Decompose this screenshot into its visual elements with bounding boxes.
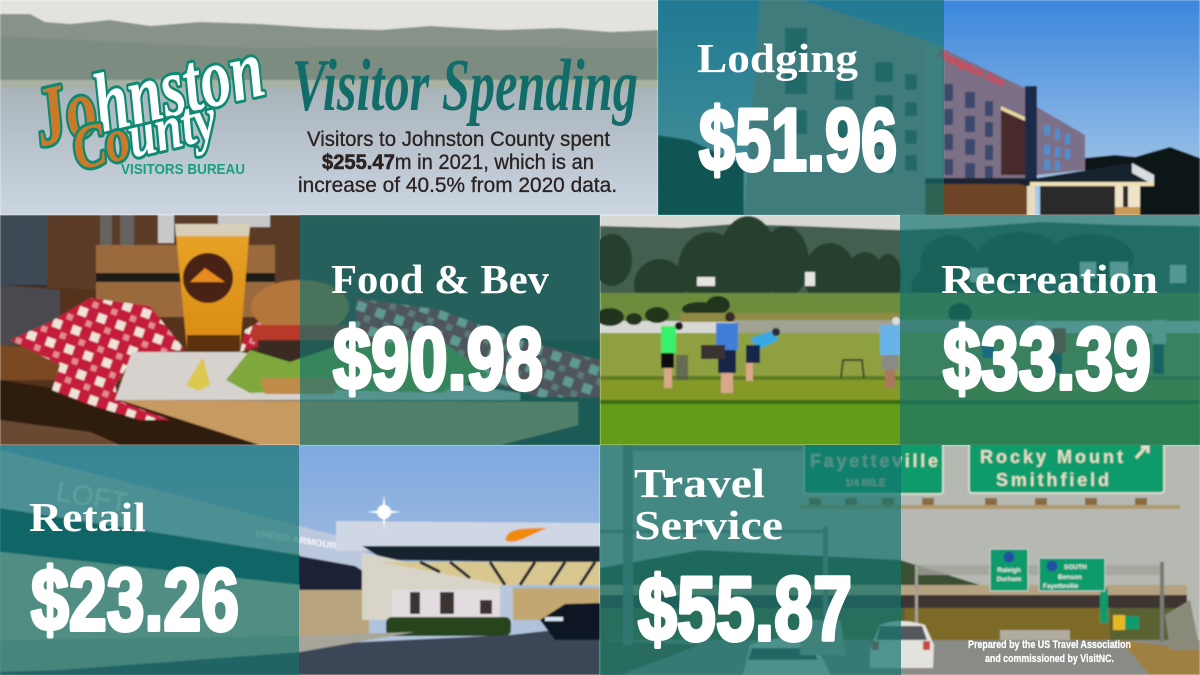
logo wordmark County: County bbox=[66, 85, 223, 184]
summary paragraph bbox=[299, 130, 616, 192]
source note bbox=[968, 639, 1131, 665]
category label bbox=[634, 460, 783, 548]
highway sign: Fayetteville: Fayetteville bbox=[810, 451, 938, 471]
category label: Service bbox=[634, 502, 783, 548]
highway sign: Rocky Mount Smithfield bbox=[969, 438, 1164, 493]
category label: Retail bbox=[29, 494, 146, 540]
source note: Prepared by the US Travel Association bbox=[968, 639, 1131, 651]
spending value: $51.96 bbox=[699, 90, 897, 189]
category label: Lodging bbox=[697, 35, 859, 81]
highway sign: Raleigh Durham bbox=[990, 549, 1028, 591]
hotel photo bbox=[658, 0, 1200, 215]
golf photo bbox=[592, 215, 1200, 445]
highway sign: I-95 South: Benson bbox=[1058, 574, 1082, 581]
teal overlay bbox=[0, 445, 299, 675]
Nike swoosh bbox=[505, 528, 548, 542]
highway photo bbox=[600, 438, 1200, 675]
spending value: $90.98 bbox=[333, 309, 543, 408]
teal overlay bbox=[600, 445, 901, 675]
highway sign: Fayetteville bbox=[804, 440, 943, 494]
highway sign: Rocky Mount Smithfield: Smithfield bbox=[996, 470, 1109, 490]
summary paragraph: increase of 40.5% from 2020 data. bbox=[298, 174, 617, 197]
highway sign: Raleigh Durham: Durham bbox=[997, 576, 1021, 583]
summary paragraph: Visitors to Johnston County spent bbox=[307, 128, 610, 151]
highway sign: I-95 South bbox=[1039, 558, 1105, 591]
teal overlay bbox=[300, 215, 600, 445]
source note: and commissioned by VisitNC. bbox=[985, 653, 1114, 665]
category label: Travel bbox=[634, 460, 765, 506]
outlet mall photo bbox=[0, 445, 600, 675]
highway sign: Rocky Mount Smithfield: Rocky Mount bbox=[980, 447, 1123, 467]
teal overlay bbox=[900, 215, 1200, 445]
hotel sign: Hampton Inn bbox=[934, 45, 1008, 90]
teal overlay bbox=[658, 0, 944, 215]
highway sign: I-95 South: Fayetteville bbox=[1043, 583, 1079, 590]
category label: Recreation bbox=[941, 256, 1158, 302]
spending value: $55.87 bbox=[638, 559, 852, 660]
logo tagline: VISITORS BUREAU bbox=[121, 161, 245, 178]
panel: Retail bbox=[0, 445, 600, 675]
highway sign: Raleigh Durham: Raleigh bbox=[997, 567, 1021, 574]
spending value: $23.26 bbox=[31, 550, 239, 649]
highway sign: Fayetteville: 1/4 MILE bbox=[845, 478, 886, 489]
panel: Recreation bbox=[592, 215, 1200, 445]
summary paragraph: $255.47m in 2021, which is an bbox=[322, 151, 594, 174]
category label: Food & Bev bbox=[331, 256, 550, 302]
cars bbox=[743, 620, 934, 675]
highway sign: I-95 South: SOUTH bbox=[1064, 564, 1087, 571]
logo wordmark Johnston: Johnston bbox=[25, 22, 272, 165]
LOFT sign: LOFT bbox=[54, 475, 130, 518]
store sign: UNDER ARMOUR bbox=[255, 528, 338, 551]
panel: Lodging bbox=[658, 0, 1200, 215]
panel: header with lake background bbox=[0, 0, 658, 215]
title: Visitor Spending: Visitor Spending bbox=[292, 45, 638, 127]
golfers bbox=[661, 312, 1166, 393]
logo: Johnston County Visitors Bureau bbox=[38, 54, 267, 174]
lake photo background bbox=[0, 0, 658, 215]
panel: Food & Bev bbox=[0, 215, 600, 445]
food photo bbox=[0, 215, 600, 445]
panel: Travel Service bbox=[600, 438, 1200, 675]
